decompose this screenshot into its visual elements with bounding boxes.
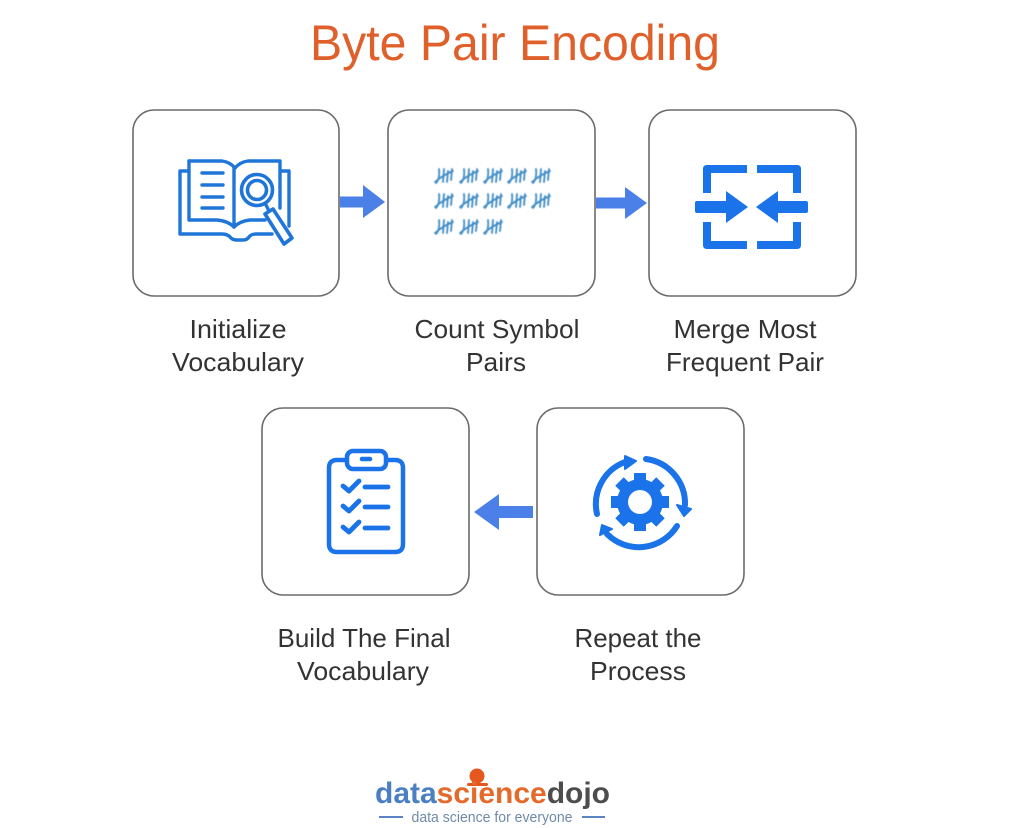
icon: gear with cycle arrows [596,456,691,547]
label: build the final vocabulary: Build The Final [278,623,450,653]
icon: checklist clipboard [329,451,403,552]
arrow: step 5 to step 4 [474,494,533,530]
label: count symbol pairs: Count Symbol [414,314,580,344]
label: repeat the process: Process [590,656,686,686]
label: build the final vocabulary: Vocabulary [297,656,429,686]
label: count symbol pairs: Pairs [466,347,526,377]
label: build the final vocabulary [278,623,450,686]
label: merge most frequent pair [666,314,824,377]
logo: data science dojo: datasciencedojo [375,777,610,810]
label: initialize vocabulary: Initialize [190,314,286,344]
title: Byte Pair Encoding [310,15,720,71]
panel: merge most frequent pair [649,110,856,296]
label: merge most frequent pair: Merge Most [674,314,817,344]
panel: build the final vocabulary [262,408,469,595]
icon: tally marks [435,169,550,234]
label: initialize vocabulary: Vocabulary [172,347,304,377]
icon: merge arrows [695,165,808,249]
logo: data science dojo [375,768,610,826]
arrow: step 2 to step 3 [596,187,647,219]
label: initialize vocabulary [172,314,304,377]
label: count symbol pairs [414,314,580,377]
label: repeat the process [574,623,702,686]
panel: repeat the process [537,408,744,595]
panel: initialize vocabulary [133,110,339,296]
label: merge most frequent pair: Frequent Pair [666,347,824,377]
label: repeat the process: Repeat the [574,623,702,653]
arrow: step 1 to step 2 [340,185,385,218]
panel: count symbol pairs [388,110,595,296]
icon: book with magnifier [180,161,292,244]
logo: data science dojo: data science for everyone [412,809,572,826]
